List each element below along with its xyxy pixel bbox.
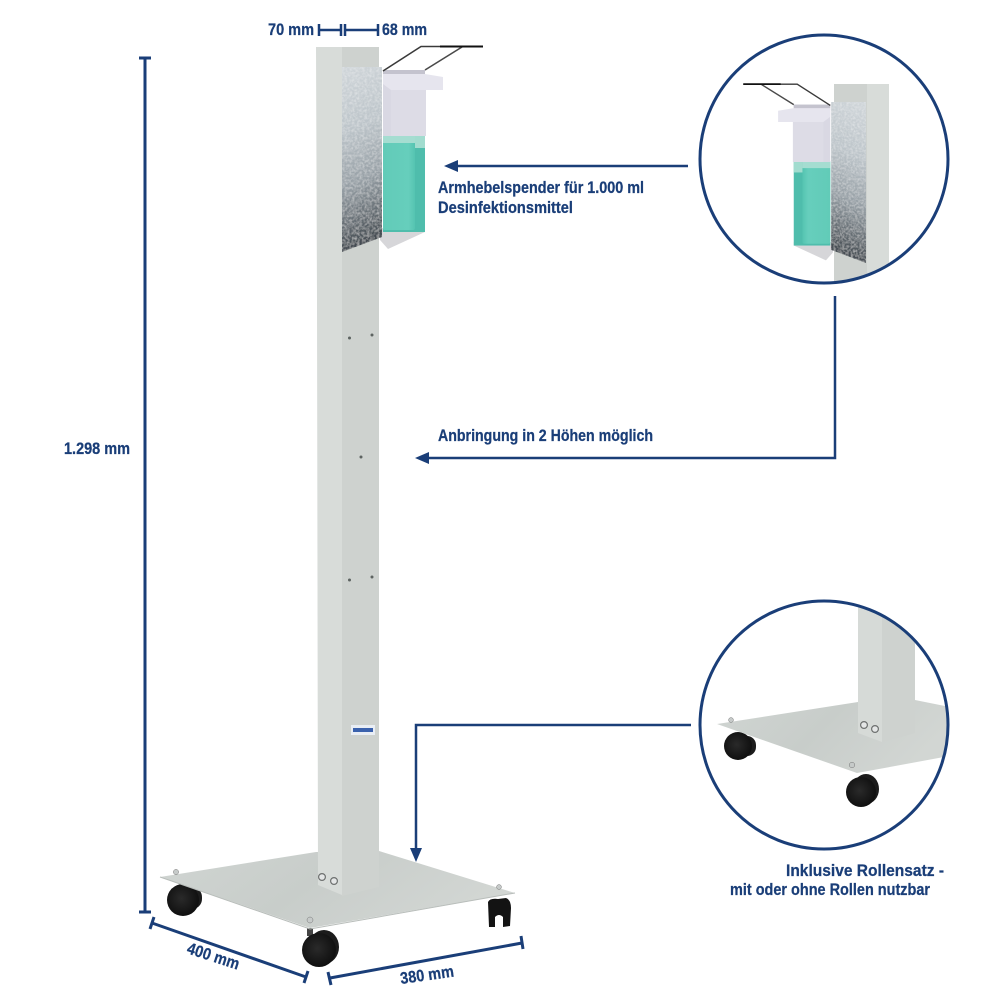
caster: right wheel	[488, 898, 511, 927]
label: 380 mm: 380 mm	[399, 963, 455, 988]
detail circle: dispenser	[700, 35, 948, 290]
logo	[351, 725, 375, 735]
text: casters caption	[730, 862, 944, 899]
stand: main product	[160, 46, 515, 967]
text: casters caption: Inklusive Rollensatz -	[786, 862, 944, 880]
caster: front wheel	[302, 928, 339, 967]
arrow: mounting heights	[415, 296, 835, 464]
zoomed dispenser image	[743, 84, 889, 290]
text: dispenser caption: Armhebelspender für 1.000 ml	[438, 179, 644, 197]
dimension: height 1.298 mm	[64, 58, 151, 912]
text: dispenser caption: Desinfektionsmittel	[438, 199, 573, 217]
text: mounting heights caption: Anbringung in 2 Höhen möglich	[438, 427, 653, 445]
dispenser	[342, 46, 483, 252]
arrow: to dispenser	[444, 160, 688, 172]
height line	[139, 58, 151, 912]
circle outline	[700, 601, 948, 849]
width line	[328, 936, 523, 985]
caster: rear left wheel	[167, 884, 202, 916]
dimension: depth 400 mm	[150, 917, 308, 983]
base plate front edge	[160, 877, 515, 929]
label: height: 1.298 mm	[64, 440, 130, 458]
label: 400 mm: 400 mm	[185, 940, 242, 973]
label: 68 mm: 68 mm	[382, 21, 427, 39]
base plate	[160, 851, 515, 928]
detail circle: casters	[700, 600, 955, 849]
pole bolts	[319, 874, 337, 884]
dimension bars	[319, 24, 378, 36]
label: 70 mm: 70 mm	[268, 21, 314, 39]
base bolts	[173, 869, 501, 923]
depth line	[150, 917, 308, 983]
mounting holes	[348, 334, 374, 582]
text: casters caption: mit oder ohne Rollen nutzbar	[730, 881, 930, 899]
dimension: width 380 mm	[328, 936, 523, 988]
pole	[316, 47, 379, 896]
circle outline	[700, 35, 948, 283]
arrow: to base	[410, 725, 691, 862]
zoomed base image	[717, 600, 955, 807]
text: dispenser caption	[438, 179, 644, 217]
dimension: pole depth 70 mm and 68 mm	[268, 21, 427, 39]
